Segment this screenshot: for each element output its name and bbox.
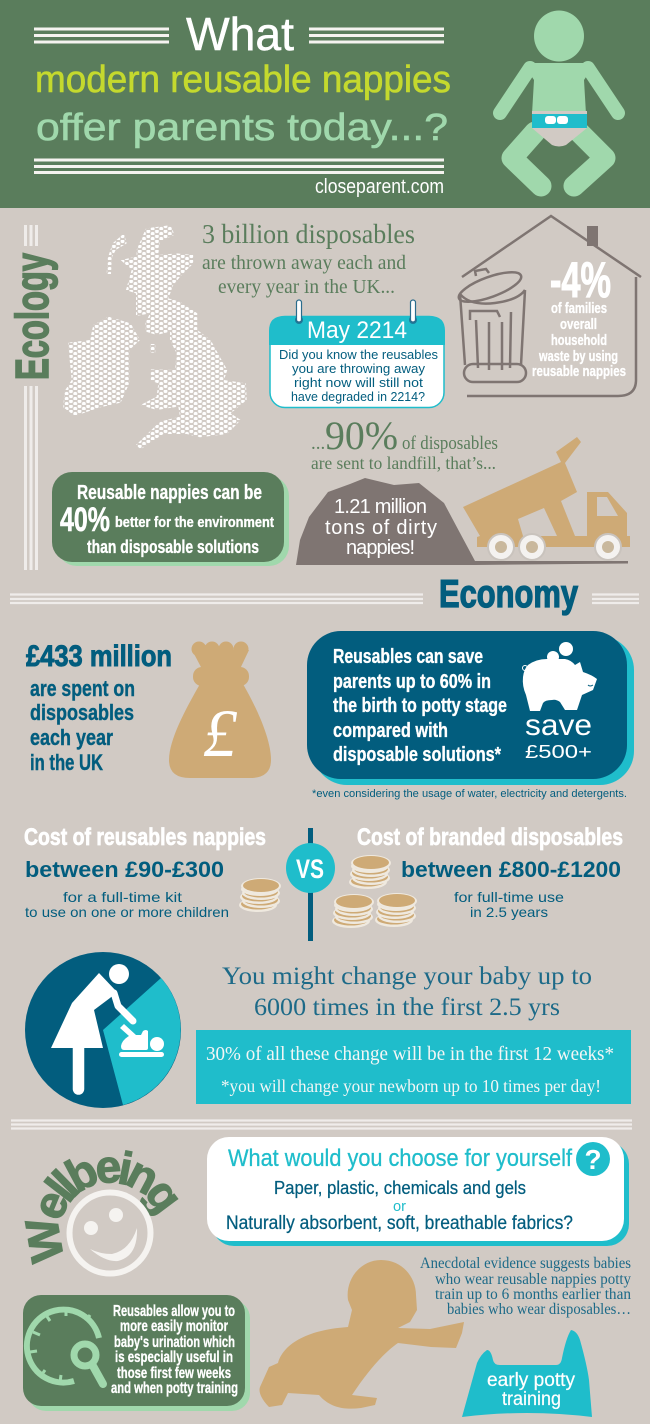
callout: what would you choose	[207, 1137, 629, 1246]
text: 3 billion disposables: are thrown away each and	[202, 253, 406, 274]
icon: versus badge	[286, 828, 335, 941]
text: 3 billion disposables: every year in the UK...	[218, 277, 395, 298]
panel: cost of branded disposables	[332, 824, 623, 928]
title: offer parents today...?	[36, 107, 448, 149]
heading: Ecology: Ecology	[6, 253, 58, 380]
heading: Economy	[10, 573, 639, 616]
callout: monitor urination	[23, 1295, 250, 1411]
text: anecdotal evidence: who wear reusable nappies potty	[435, 1271, 631, 1288]
icon: mother changing baby	[25, 952, 181, 1108]
callout: 40% better for the environment: better for the environment	[115, 514, 274, 531]
callout: calendar May 2214: have degraded in 2214?	[291, 389, 425, 404]
icon: potty with early potty training: early potty	[487, 1370, 575, 1391]
callout: calendar May 2214: Did you know the reusables	[279, 347, 438, 362]
icon: piggy bank	[522, 642, 597, 711]
callout: reusables can save: parents up to 60% in	[333, 671, 491, 693]
panel: cost of reusables: to use on one or more children	[25, 904, 229, 920]
callout: what would you choose: ?	[584, 1144, 602, 1175]
text: 90% of disposables: 90%	[325, 413, 398, 458]
footnote: water, electricity and detergents: *even considering the usage of water, electricity and detergents.	[312, 788, 627, 800]
icon: rubbish bin	[456, 266, 526, 382]
callout: reusables can save: the birth to potty stage	[333, 695, 507, 717]
text: -4% of families: waste by using	[538, 348, 618, 365]
icon: potty with early potty training	[462, 1330, 592, 1417]
icon: coin stack	[239, 878, 281, 912]
title: modern reusable nappies	[35, 59, 451, 101]
callout: monitor urination: and when potty training	[111, 1380, 238, 1397]
title: closeparent.com	[315, 176, 444, 198]
callout: what would you choose: Naturally absorbent, soft, breathable fabrics?	[226, 1213, 573, 1234]
illustration: nappy landfill pile: nappies!	[346, 537, 415, 559]
panel: cost of reusables: for a full-time kit	[63, 889, 182, 905]
panel: cost of reusables: Cost of reusables nappies	[24, 824, 266, 851]
callout: monitor urination: baby's urination which	[114, 1334, 235, 1351]
callout: first 12 weeks: *you will change your newborn up to 10 times per day!	[221, 1076, 601, 1096]
callout: calendar May 2214: you are throwing away	[292, 361, 426, 376]
callout: monitor urination: Reusables allow you to	[113, 1303, 235, 1320]
text: anecdotal evidence: Anecdotal evidence suggests babies	[420, 1255, 631, 1272]
panel: cost of reusables	[24, 824, 281, 920]
text: £433 million spent: disposables	[30, 700, 134, 725]
callout: monitor urination: more easily monitor	[120, 1318, 228, 1335]
panel: cost of branded disposables: in 2.5 years	[470, 904, 548, 920]
callout: what would you choose: or	[393, 1198, 406, 1215]
text: -4% of families: household	[551, 332, 607, 349]
illustration: crawling baby silhouette	[259, 1260, 464, 1409]
illustration: dump truck	[463, 437, 630, 560]
text: save £500+	[525, 709, 592, 762]
text: 90% of disposables	[311, 413, 498, 473]
text: anecdotal evidence	[420, 1255, 631, 1318]
callout: calendar May 2214	[269, 300, 445, 408]
panel: economy	[10, 573, 639, 1417]
callout: reusables can save	[307, 631, 634, 785]
panel: header	[0, 0, 650, 208]
callout: 40% better for the environment: than disposable solutions	[87, 537, 259, 557]
heading: Economy: Economy	[439, 573, 578, 616]
text: anecdotal evidence: train up to 6 months earlier than	[435, 1286, 631, 1303]
callout: monitor urination: is especially useful in	[115, 1349, 233, 1366]
icon: money bag	[169, 642, 271, 778]
icon: baby in nappy	[500, 10, 618, 186]
callout: calendar May 2214: right now will still not	[294, 375, 423, 390]
panel: cost of branded disposables: for full-time use	[454, 889, 564, 905]
text: -4% of families: of families	[551, 300, 607, 317]
text: save £500+: £500+	[525, 742, 592, 762]
illustration: nappy landfill pile: 1.21 million	[334, 496, 427, 518]
text: 90% of disposables: are sent to landfill, that’s...	[311, 453, 496, 473]
callout: 40% better for the environment: 40%	[60, 501, 110, 539]
text: £433 million spent: £433 million	[26, 640, 172, 673]
callout: reusables can save: disposable solutions*	[333, 744, 501, 766]
icon: smiley	[70, 1192, 150, 1274]
map: dotted UK and Ireland	[63, 225, 247, 449]
callout: what would you choose: Paper, plastic, chemicals and gels	[274, 1178, 526, 1198]
text: -4% of families: overall	[560, 316, 597, 333]
callout: reusables can save: compared with	[333, 720, 448, 742]
text: 6000 changes	[222, 963, 592, 1021]
panel: wellbeing	[11, 1119, 632, 1417]
callout: 40% better for the environment: Reusable nappies can be	[77, 482, 262, 504]
text: £433 million spent	[26, 640, 172, 775]
text: £433 million spent: are spent on	[30, 676, 135, 701]
text: save £500+: save	[525, 709, 592, 742]
icon: versus badge: VS	[296, 854, 324, 884]
panel: ecology	[6, 216, 641, 570]
title: What	[186, 8, 294, 60]
illustration: nappy landfill pile	[296, 478, 628, 565]
icon: potty with early potty training: training	[502, 1389, 561, 1410]
text: -4% of families	[532, 252, 626, 380]
text: 90% of disposables: ...	[311, 433, 325, 454]
callout: first 12 weeks	[196, 1030, 631, 1104]
text: 3 billion disposables: 3 billion disposables	[202, 219, 415, 249]
text: -4% of families: -4%	[550, 252, 611, 308]
text: £433 million spent: each year	[30, 725, 113, 750]
callout: first 12 weeks: 30% of all these change will be in the first 12 weeks*	[206, 1043, 614, 1065]
text: £433 million spent: in the UK	[30, 750, 103, 775]
heading: Wellbeing on an arc: Wellbeing	[24, 1150, 178, 1266]
callout: what would you choose: What would you choose for yourself	[228, 1145, 572, 1172]
icon: clock and magnifier	[27, 1308, 103, 1384]
illustration: nappy landfill pile: tons of dirty	[325, 517, 437, 539]
text: 6000 changes: 6000 times in the first 2.5 yrs	[254, 994, 560, 1021]
icon: money bag: £	[203, 695, 238, 771]
icon: house outline	[462, 216, 641, 396]
title	[34, 8, 451, 198]
callout: calendar May 2214: May 2214	[307, 317, 407, 344]
callout: reusables can save: Reusables can save	[333, 646, 483, 668]
heading: Ecology	[6, 225, 58, 570]
icons: coin stacks	[332, 855, 417, 928]
text: 90% of disposables: of disposables	[402, 433, 498, 454]
text: 6000 changes: You might change your baby up to	[222, 963, 592, 990]
text: 3 billion disposables	[202, 219, 415, 298]
panel: cost of branded disposables: between £800-£1200	[401, 857, 621, 882]
callout: monitor urination: those first few weeks	[117, 1365, 231, 1382]
panel: cost of reusables: between £90-£300	[25, 857, 224, 882]
text: anecdotal evidence: babies who wear disposables…	[447, 1301, 631, 1318]
callout: 40% better for the environment	[52, 472, 289, 566]
